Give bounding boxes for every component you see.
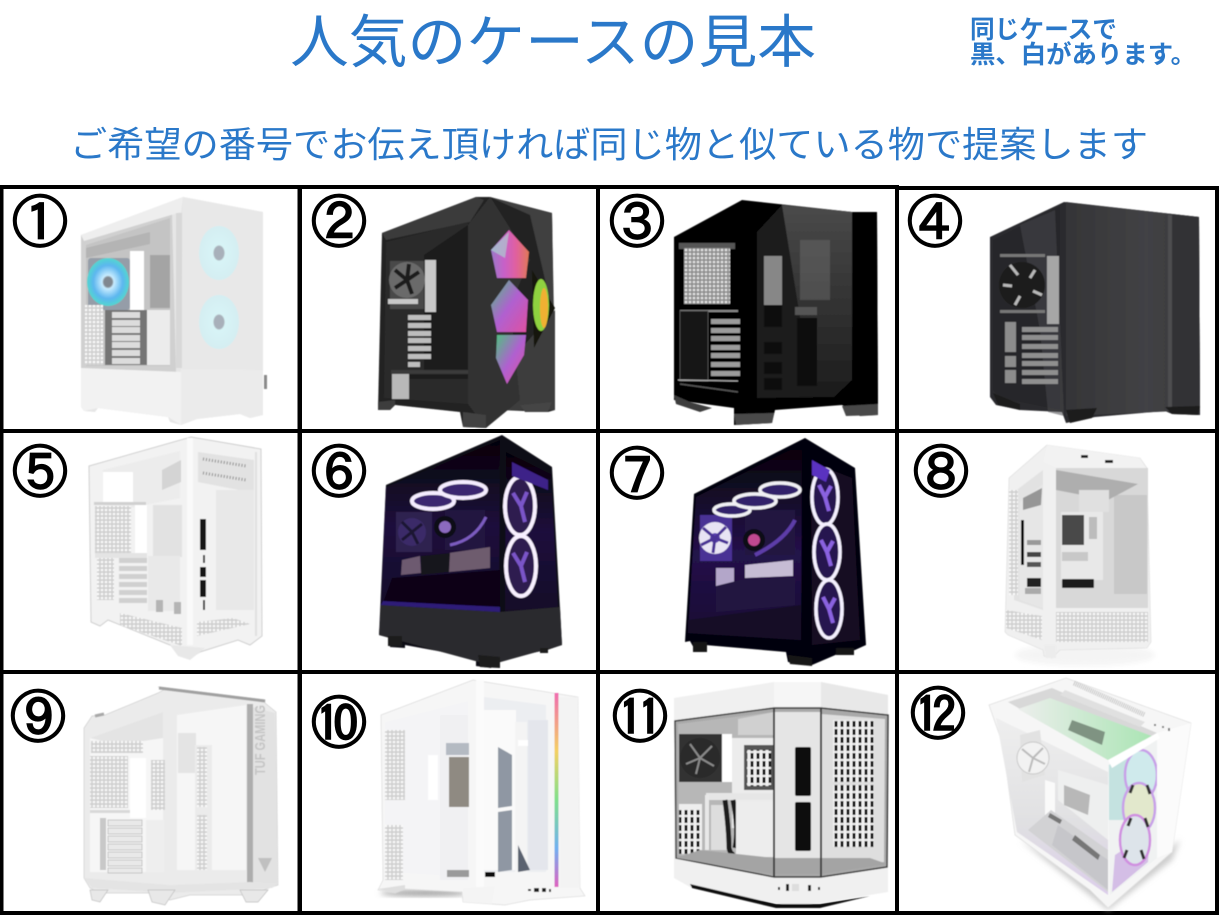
panel: case 7 [598,431,897,672]
number 1: ① [12,193,68,249]
icon: black tower with purple lighting and three fans [685,438,866,666]
number 6: ⑥ [311,443,367,499]
panel: case 9 [2,672,300,913]
number 5: ⑤ [12,443,68,499]
panel: case 5 [2,431,300,672]
number 3: ③ [609,193,665,249]
panel: case 8 [897,431,1217,672]
number 2: ② [311,193,367,249]
side note: 同じケースで [970,16,1117,44]
number 7: ⑦ [609,445,665,501]
icon: white dual chamber case with rainbow strip [378,680,585,905]
icon: white TUF case [84,687,278,905]
number 12: ⑫ [910,685,966,741]
panel: case 3 [598,187,897,431]
icon: black case with rgb diamond front [378,197,555,428]
panel: case 2 [300,187,598,431]
panel: case 12 [897,672,1217,913]
number 11: ⑪ [612,688,668,744]
title: 人気のケースの見本 [290,11,816,75]
icon: black dual chamber case [674,200,878,425]
subtitle: ご希望の番号でお伝え頂ければ同じ物と似ている物で提案します [70,125,1148,165]
icon: white panoramic case [674,682,888,908]
panel: case 10 [300,672,598,913]
number 10: ⑩ [311,694,367,750]
icon: black case with purple lighting [379,435,562,668]
icon: white mesh case with rgb fans [81,197,267,425]
panel: case 1 [2,187,300,431]
icon: dark grey mesh case [990,202,1200,423]
icon: white glass case [89,437,262,660]
panel: case 11 [598,672,897,913]
icon: white cube case [1005,445,1155,666]
number 4: ④ [907,193,963,249]
panel: case 4 [897,188,1217,431]
panel: case 6 [300,431,598,672]
side note: 黒、白があります。 [970,40,1196,69]
icon: white case viewed from above with rgb fans [989,678,1191,910]
side note [970,16,1196,69]
icon: white TUF case: TUF GAMING [252,705,269,775]
number 9: ⑨ [10,688,66,744]
number 8: ⑧ [913,443,969,499]
